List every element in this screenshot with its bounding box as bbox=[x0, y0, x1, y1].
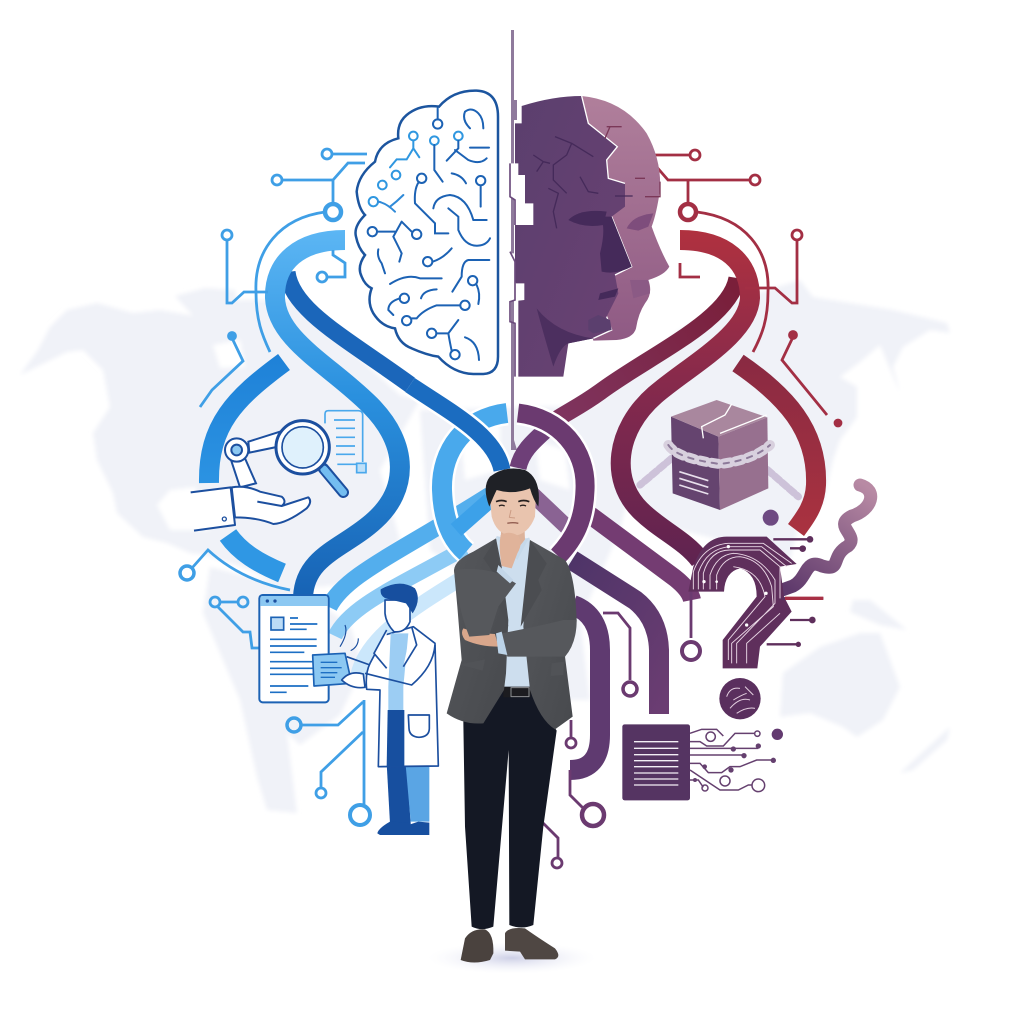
ribbon: purple ring bbox=[518, 413, 585, 556]
icon: brain with circuits bbox=[356, 91, 498, 374]
hand at chin bbox=[500, 533, 521, 568]
question mark trace lines bbox=[767, 539, 823, 644]
purple circuit traces bbox=[543, 590, 700, 868]
brain circuit traces bbox=[368, 108, 490, 360]
facial shadows bbox=[600, 217, 632, 273]
chin pieces bbox=[588, 315, 612, 333]
held paper bbox=[313, 653, 352, 686]
facial features bbox=[496, 500, 529, 502]
ribbon: maroon diagonal bbox=[545, 278, 737, 428]
icon: robot hand with magnifier bbox=[191, 411, 366, 531]
scientist legs bbox=[387, 763, 411, 823]
icon: chained box bbox=[640, 400, 798, 526]
central dividing line bbox=[511, 30, 517, 450]
lab coat bbox=[366, 627, 438, 767]
ribbon: left loop lower bbox=[228, 535, 282, 573]
ribbon: dark blue crossing halo bbox=[410, 385, 502, 470]
magnifier bbox=[276, 421, 343, 492]
trousers bbox=[463, 690, 557, 929]
crossed forearm bbox=[502, 620, 577, 657]
blazer bbox=[447, 538, 508, 724]
scientist figure bbox=[313, 584, 438, 835]
ribbon: lower band one bbox=[329, 495, 490, 607]
ribbon: lower band three bbox=[357, 578, 462, 680]
shoes bbox=[461, 929, 493, 962]
document behind magnifier bbox=[325, 411, 366, 473]
belt bbox=[503, 687, 531, 697]
crossed right hand bbox=[462, 628, 498, 647]
smoke wisp bbox=[782, 485, 871, 590]
icon: circuit question mark bbox=[688, 536, 823, 719]
ribbon: centre ring halo bbox=[442, 413, 507, 552]
central man in grey blazer bbox=[447, 468, 577, 962]
robot arm bbox=[225, 432, 280, 487]
ribbon: ring cross band bbox=[530, 492, 570, 530]
ribbon: purple band one bbox=[590, 515, 692, 600]
icon: fractured human face bbox=[508, 96, 669, 377]
ribbon: purple band three bbox=[570, 605, 600, 770]
hair bbox=[486, 468, 539, 507]
lower chain strands bbox=[640, 458, 798, 497]
red circuit traces bbox=[640, 150, 841, 426]
question mark circuit lines bbox=[693, 543, 792, 663]
icon: document with circuit traces bbox=[622, 724, 783, 800]
dark front face bbox=[515, 96, 632, 377]
scientist head bbox=[385, 600, 410, 632]
icon: browser document window bbox=[259, 595, 329, 702]
brain outline bbox=[356, 91, 498, 374]
ribbon: right loop bbox=[738, 363, 816, 530]
box faces bbox=[671, 417, 720, 510]
ribbon: left loop upper bbox=[209, 362, 284, 483]
document block bbox=[622, 724, 690, 800]
world map background bbox=[20, 280, 950, 813]
box label lines bbox=[679, 472, 708, 494]
ribbon: dark blue diagonal bbox=[287, 272, 420, 392]
scientist shoes bbox=[377, 822, 429, 835]
ribbon: light blue upper s-curve bbox=[275, 240, 400, 597]
cuff and hand bbox=[191, 487, 310, 531]
red and purple ribbon network bbox=[518, 240, 816, 770]
shirt collar bbox=[497, 536, 529, 563]
purple dot bbox=[763, 510, 779, 526]
ribbon: centre ring bbox=[442, 413, 507, 552]
lapels and pocket bbox=[483, 538, 547, 627]
raised arm bbox=[454, 569, 516, 637]
box crack bbox=[702, 404, 767, 438]
circuit traces bbox=[690, 729, 772, 792]
jagged white gaps at the split bbox=[508, 163, 533, 302]
white map gaps bbox=[157, 340, 570, 530]
ribbon: inner diagonal remainder bbox=[518, 428, 548, 468]
ribbon: purple ring halo bbox=[518, 413, 585, 556]
neck bbox=[501, 517, 525, 553]
blue ribbon network bbox=[209, 240, 507, 680]
ribbon: dark blue crossing bbox=[410, 385, 502, 470]
question mark shape bbox=[688, 537, 797, 668]
shirt bbox=[496, 537, 530, 688]
crack veins bbox=[533, 137, 633, 228]
ribbon: cross band bbox=[456, 500, 490, 530]
head bbox=[489, 473, 536, 536]
ribbon: red upper s-curve bbox=[621, 240, 750, 560]
purple dot bbox=[772, 729, 783, 740]
chain around box bbox=[668, 445, 770, 464]
fracture line bbox=[582, 96, 632, 338]
ribbon: purple band two bbox=[572, 560, 659, 714]
ribbon: lower band two bbox=[335, 548, 465, 636]
question mark dot bbox=[719, 678, 761, 719]
scientist hand and arm bbox=[342, 657, 370, 688]
blue circuit traces bbox=[180, 149, 370, 825]
light rear face bbox=[573, 96, 669, 341]
ground shadow bbox=[428, 942, 596, 974]
